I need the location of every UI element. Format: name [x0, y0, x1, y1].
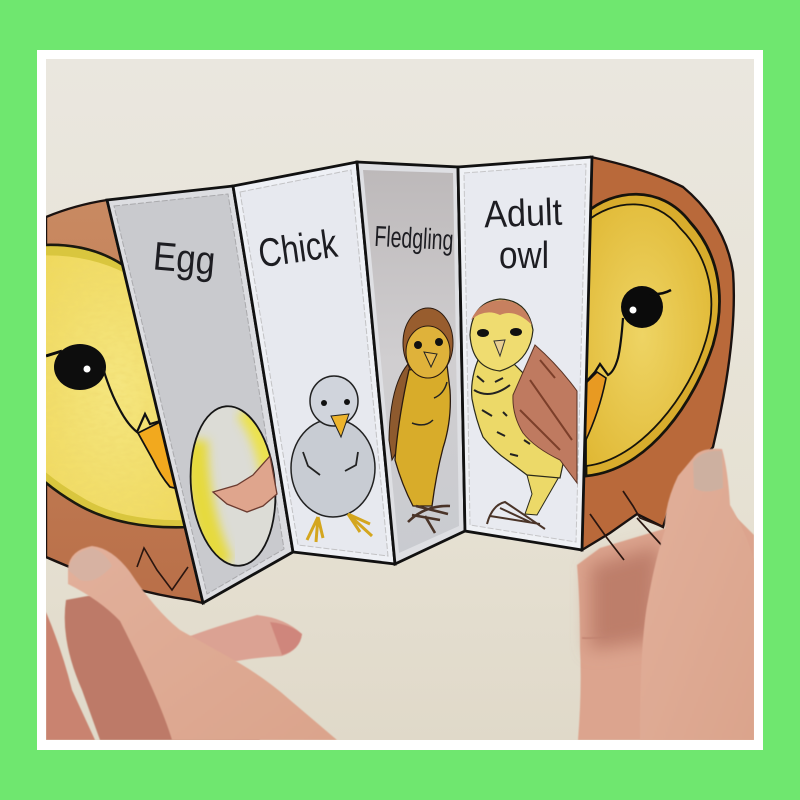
- face disc right: [586, 204, 711, 466]
- chick head: [310, 376, 358, 426]
- face ring right: [586, 194, 719, 476]
- fledgling beak: [424, 352, 437, 367]
- chick wings: [303, 452, 358, 475]
- panel: egg: [107, 186, 293, 603]
- panel: adult owl: [458, 157, 592, 550]
- beak line right: [586, 318, 623, 382]
- icon: fledgling owl: [389, 308, 453, 533]
- yellow face left: [46, 244, 184, 529]
- chick beak: [331, 414, 349, 437]
- chick panel paper: [233, 162, 395, 564]
- left thumbnail: [68, 548, 112, 581]
- egg heading: Egg: [151, 234, 217, 284]
- chick body: [291, 419, 375, 517]
- eye right: [621, 286, 671, 328]
- index fingertip: [270, 622, 302, 655]
- shadowed palm: [65, 590, 260, 740]
- fledgling face: [406, 326, 450, 378]
- adult owl legs: [525, 464, 563, 515]
- fledgling chest marks: [412, 382, 447, 425]
- right thumb skin: [640, 449, 754, 740]
- beak left: [138, 422, 179, 489]
- right palm: [577, 508, 754, 740]
- egg base: [197, 407, 274, 565]
- fledgling heading: Fledgling: [374, 221, 454, 257]
- icon: adult owl: [470, 299, 577, 529]
- chick wing in egg: [213, 456, 277, 512]
- fledgling wing: [389, 364, 415, 460]
- adult owl head: [470, 299, 533, 371]
- feather marks left: [137, 548, 188, 590]
- adult owl eyes: [477, 328, 522, 337]
- right thumb: [640, 449, 754, 740]
- right thumbnail: [693, 451, 723, 492]
- palm crease: [582, 637, 594, 639]
- adult panel paper: [458, 157, 592, 550]
- index finger: [190, 614, 300, 662]
- brown feathers right: [582, 157, 734, 550]
- chick feet: [307, 514, 372, 542]
- beak right: [585, 372, 606, 442]
- adult owl markings: [474, 376, 530, 456]
- adult owl beak: [494, 340, 505, 356]
- icon: chick: [291, 376, 375, 542]
- brown feathers left: [46, 200, 203, 603]
- right owl half: [582, 157, 734, 560]
- right hand behind paper: [577, 508, 754, 740]
- wall background: [46, 59, 754, 740]
- face ring left: [46, 244, 184, 529]
- egg outline: [190, 405, 276, 567]
- adult panel inset: [464, 164, 586, 542]
- icon: hatching egg: [190, 405, 278, 567]
- fledgling eyes: [414, 338, 443, 349]
- adult owl body: [472, 360, 563, 478]
- fledgling talons: [408, 506, 450, 533]
- adult owl wing: [513, 345, 577, 483]
- far finger: [46, 612, 95, 740]
- chick heading: Chick: [256, 222, 341, 276]
- white photo frame: [37, 50, 763, 750]
- panel: chick: [233, 162, 395, 564]
- fledgling panel tint: [363, 170, 459, 553]
- egg yellow shading: [196, 410, 272, 565]
- chick eyes: [321, 399, 350, 406]
- face disc left: [46, 255, 182, 520]
- fledgling hood: [403, 308, 453, 378]
- photo of fold-out owl craft: [30, 59, 754, 740]
- egg panel tint: [114, 194, 284, 594]
- beak line left: [103, 368, 160, 432]
- fledgling body: [395, 365, 450, 506]
- fold-out booklet: [107, 157, 592, 603]
- adult owl talons: [487, 502, 545, 529]
- owl heading: owl: [499, 235, 549, 277]
- adult owl crown: [471, 300, 532, 325]
- left thumb skin: [68, 546, 337, 740]
- infographic canvas: [37, 50, 763, 750]
- feather marks right: [590, 491, 665, 560]
- left hand behind paper: [46, 590, 302, 740]
- fledgling panel paper: [357, 162, 465, 564]
- palm shadow: [590, 545, 660, 650]
- adult heading: Adult: [483, 192, 563, 236]
- adult owl wing feathers: [520, 360, 572, 450]
- left owl half: [30, 200, 203, 603]
- yellow face right: [586, 194, 719, 476]
- left thumb: [68, 546, 337, 740]
- panel: fledgling: [357, 162, 465, 564]
- egg panel paper: [107, 186, 293, 603]
- chick panel inset: [240, 170, 388, 556]
- eye left: [46, 344, 106, 390]
